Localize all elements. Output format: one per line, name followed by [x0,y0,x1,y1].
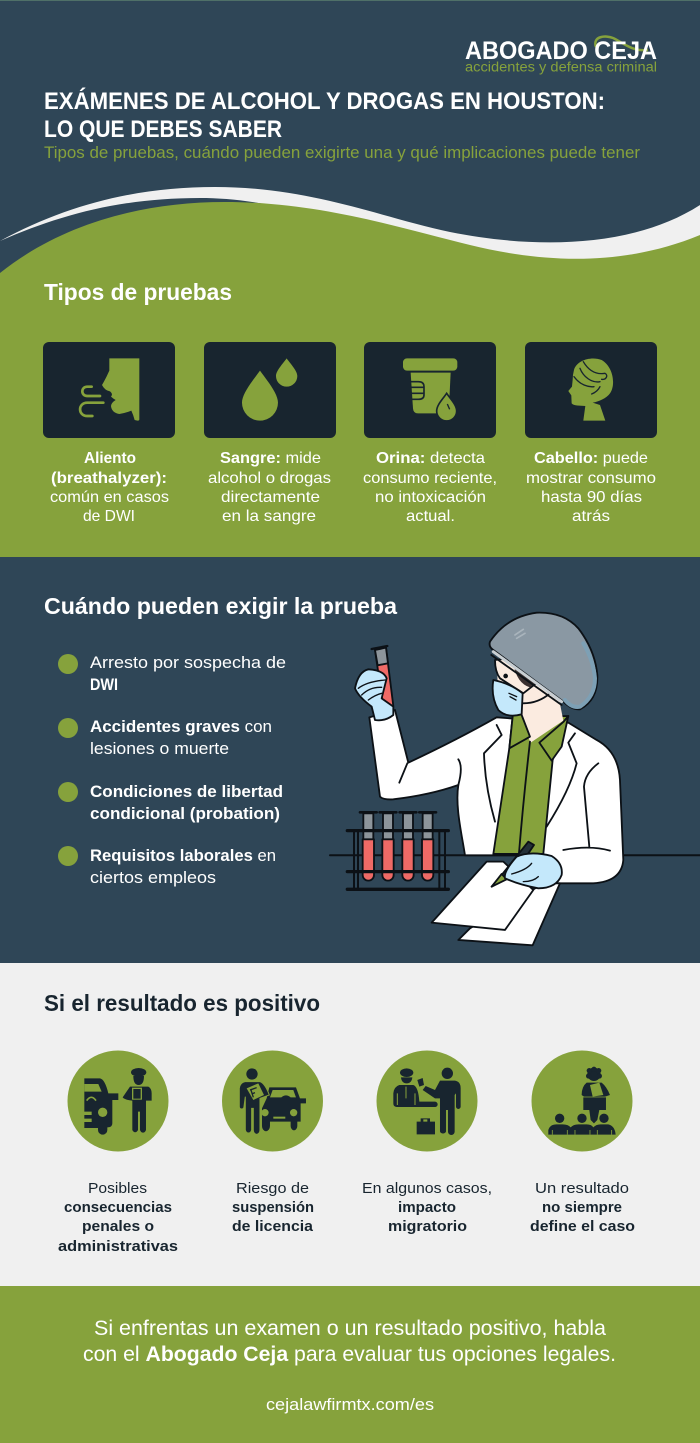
item: migratorio: impacto [398,1199,456,1216]
bullet list: Condiciones de libertad [90,782,283,801]
bullet list: lesiones o muerte [90,739,229,758]
item: migratorio: En algunos casos, [362,1180,492,1197]
item: migratorio [362,1050,492,1235]
item: consecuencias: administrativas [58,1238,178,1255]
card: sangre: Sangre: mide [220,450,321,467]
wave: white ribbon [0,187,700,300]
item: consecuencias [58,1050,178,1255]
logo: ABOGADO CEJA [465,37,657,65]
panel: si el resultado es positivo [0,963,700,1286]
item: licencia: de licencia [232,1218,314,1235]
right glove [505,853,562,888]
card: aliento: Aliento [84,450,136,467]
panel: header [0,0,700,557]
shirt collar [509,715,568,761]
test tube rack [347,812,448,889]
panel: cuando pueden exigir la prueba [0,557,700,963]
item: caso: define el caso [530,1218,635,1235]
card: aliento [43,342,175,525]
item: consecuencias: Posibles [88,1180,147,1197]
item: caso [530,1050,635,1235]
card: cabello [525,342,657,525]
card: aliento: común en casos [50,489,169,506]
bullet list: Arresto por sospecha de [90,653,286,672]
call to action text: Si enfrentas un examen o un resultado positivo, habla [94,1317,606,1340]
card: orina: Orina: detecta [376,450,485,467]
left glove [355,669,393,720]
title: EXÁMENES DE ALCOHOL Y DROGAS EN HOUSTON: [44,87,605,115]
item: licencia [222,1050,323,1235]
papers [458,883,560,945]
mask [493,680,523,716]
card: sangre [204,342,336,525]
card: orina: actual. [406,508,455,525]
pen [492,842,534,887]
card: orina: no intoxicación [375,489,486,506]
card: sangre: en la sangre [222,508,316,525]
card: sangre: alcohol o drogas [208,470,331,487]
bullet list: ciertos empleos [90,868,216,887]
call to action text [83,1317,616,1366]
item: consecuencias: penales o [82,1218,154,1235]
card: orina: consumo reciente, [363,470,497,487]
hair cap [490,613,597,709]
bullet list: condicional (probation) [90,804,280,823]
item: caso: no siempre [542,1199,622,1216]
card: sangre: directamente [221,489,320,506]
card: cabello: mostrar consumo [526,470,656,487]
call to action text: con el Abogado Ceja para evaluar tus opciones legales. [83,1343,616,1366]
title [44,87,605,143]
heading: tipos de pruebas: Tipos de pruebas [44,279,232,305]
card: aliento: de DWI [83,508,135,525]
subtitle: Tipos de pruebas, cuándo pueden exigirte una y qué implicaciones puede tener [44,143,640,162]
item: licencia: Riesgo de [236,1180,309,1197]
card: aliento: (breathalyzer): [51,470,167,487]
card: cabello: atrás [572,508,610,525]
panel: footer call to action [0,1286,700,1443]
item: licencia: suspensión [232,1199,314,1216]
bullet list: Accidentes graves con [90,717,272,736]
bullet list [58,653,286,887]
title: LO QUE DEBES SABER [44,116,282,143]
item: consecuencias: consecuencias [64,1199,172,1216]
bullet list: DWI [90,675,118,694]
card: cabello: Cabello: puede [534,450,648,467]
heading: cuando: Cuándo pueden exigir la prueba [44,593,397,619]
card: cabello: hasta 90 días [541,489,642,506]
heading: resultado: Si el resultado es positivo [44,990,320,1016]
card: orina [363,342,497,525]
item: migratorio: migratorio [388,1218,467,1235]
panel: tipos de pruebas [0,202,700,557]
illustration: lab technician [330,613,700,945]
neck and face [497,658,563,743]
website: cejalawfirmtx.com/es [266,1395,434,1414]
lab coat [369,710,623,883]
held test tube [375,648,393,708]
green shirt [493,716,568,854]
logo: accidentes y defensa criminal [465,60,657,74]
bullet list: Requisitos laborales en [90,846,276,865]
item: caso: Un resultado [535,1180,629,1197]
